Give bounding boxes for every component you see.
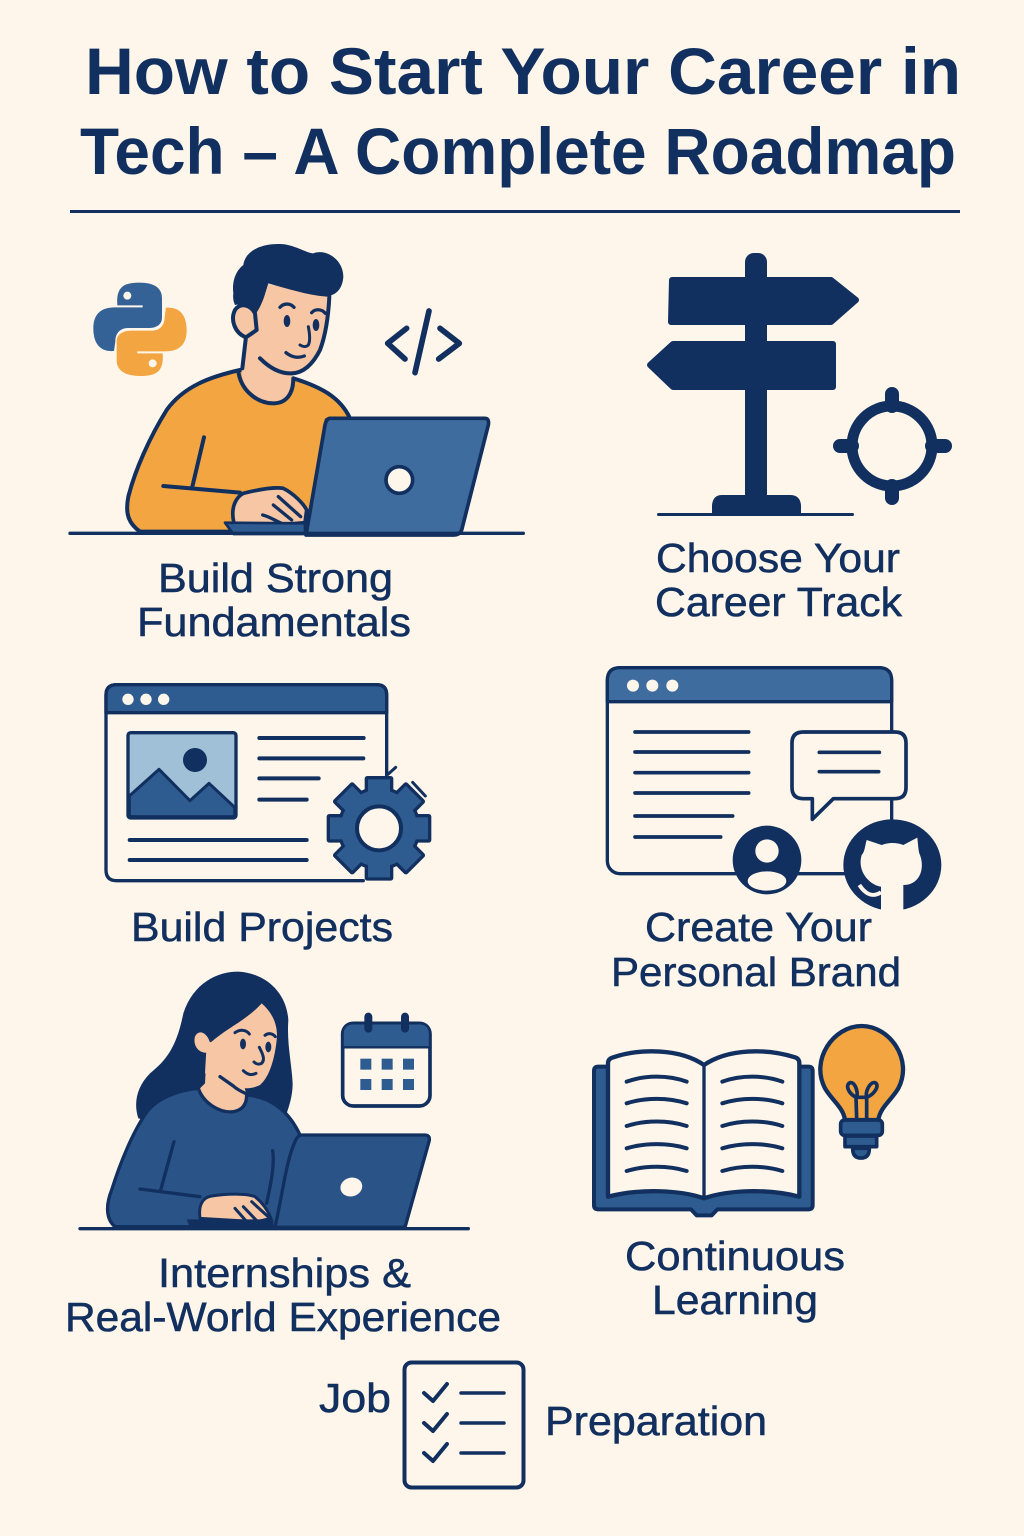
panel: build strong fundamentals xyxy=(70,244,523,645)
panel: internships and real-world experience xyxy=(65,972,501,1340)
person xyxy=(108,1003,300,1227)
speech bubble xyxy=(792,732,906,819)
icon: laptop xyxy=(275,1135,429,1227)
label: Build Projects xyxy=(131,904,393,950)
icon: code brackets xyxy=(388,311,459,373)
text lines xyxy=(130,738,364,860)
avatar xyxy=(733,826,801,894)
icon: calendar xyxy=(343,1017,430,1106)
icon: python logo xyxy=(93,283,187,376)
panel: choose your career track xyxy=(650,253,945,625)
label: Continuous xyxy=(625,1233,845,1279)
label: Create Your xyxy=(645,904,872,950)
icon: signpost xyxy=(650,253,856,516)
icon: gear xyxy=(328,778,430,879)
image placeholder xyxy=(128,733,236,818)
icon: checklist xyxy=(404,1362,524,1488)
label: Internships & xyxy=(158,1250,411,1296)
illustration: man at laptop with python logo and code symbol xyxy=(70,244,523,535)
label: Preparation xyxy=(545,1398,767,1444)
icon: browser window with image and gear xyxy=(106,685,430,881)
hair xyxy=(136,972,293,1133)
panel: create your personal brand xyxy=(607,668,941,995)
icon: profile page with chat, avatar and github xyxy=(607,668,941,913)
title: Tech – A Complete Roadmap xyxy=(80,114,956,188)
label: Personal Brand xyxy=(611,949,901,995)
label: Fundamentals xyxy=(137,599,411,645)
icon: github xyxy=(843,819,941,913)
illustration: woman at laptop with calendar xyxy=(80,972,468,1229)
title xyxy=(80,34,961,188)
label: Build Strong xyxy=(158,555,393,601)
icon: book xyxy=(594,1051,813,1215)
label: Job xyxy=(319,1375,391,1421)
illustration: open book and light bulb xyxy=(594,1026,903,1215)
panel: build projects xyxy=(106,685,430,950)
label: Real-World Experience xyxy=(65,1294,501,1340)
text lines xyxy=(635,732,749,837)
person xyxy=(127,244,350,532)
label: Career Track xyxy=(655,579,903,625)
panel: continuous learning xyxy=(594,1026,903,1323)
icon: light bulb xyxy=(820,1026,903,1158)
panel: job preparation xyxy=(319,1362,767,1488)
title: How to Start Your Career in xyxy=(85,34,961,108)
label: Choose Your xyxy=(656,535,900,581)
label: Learning xyxy=(652,1277,818,1323)
icon: target xyxy=(840,394,945,498)
icon: laptop xyxy=(225,418,489,535)
